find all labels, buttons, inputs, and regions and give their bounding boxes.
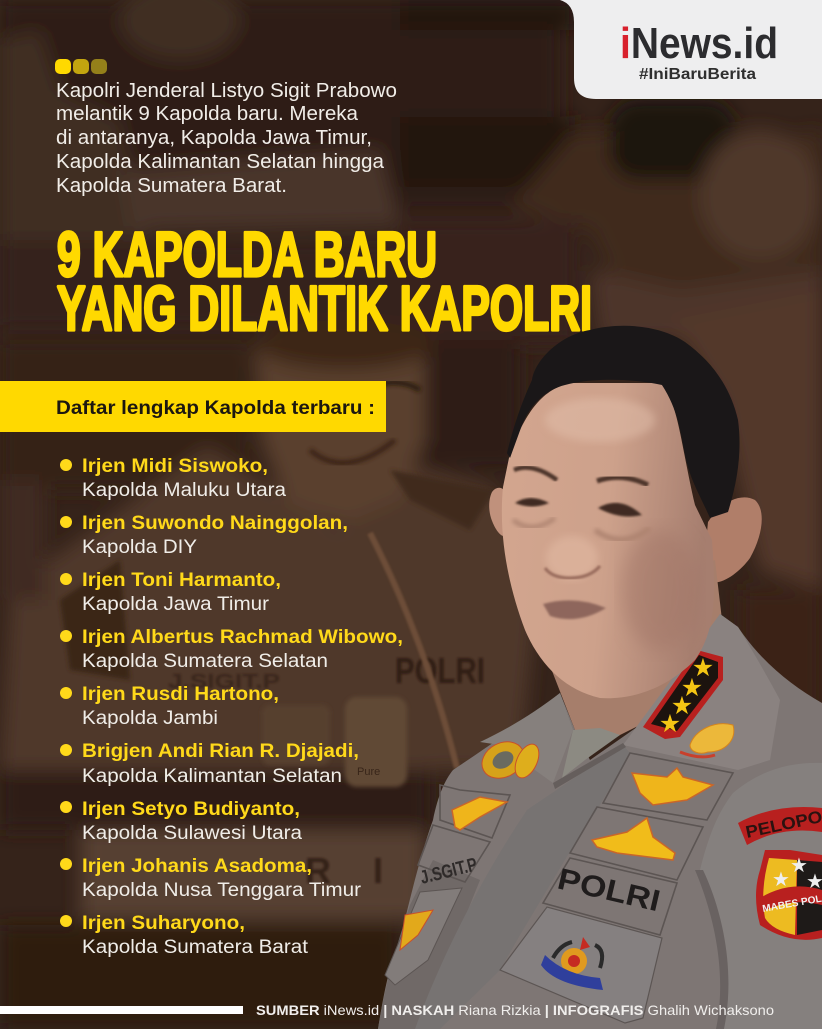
list item 6	[60, 741, 359, 787]
face	[502, 383, 714, 698]
sleeve small badge	[400, 910, 433, 950]
undershirt	[562, 728, 620, 778]
POLRI tag: POLRI	[554, 863, 663, 918]
ear left	[489, 488, 508, 536]
list item 1: Kapolda Maluku Utara	[82, 480, 286, 501]
uniform body	[378, 614, 822, 1029]
chest tabs seams	[418, 753, 733, 935]
footer credits: SUMBER iNews.id | NASKAH Riana Rizkia | INFOGRAFIS Ghalih Wichaksono	[256, 1002, 774, 1018]
shield patch	[756, 850, 822, 940]
stars: ★	[681, 674, 703, 702]
wing badge 2	[452, 797, 507, 830]
list item 6: Brigjen Andi Rian R. Djajadi,	[82, 741, 359, 762]
shield patch: MABES POL	[762, 894, 822, 915]
list item 7: Kapolda Sulawesi Utara	[82, 823, 302, 844]
list item 1	[60, 456, 286, 501]
list item 2: Kapolda DIY	[82, 537, 197, 558]
PELOPOR patch: PELOPO	[744, 807, 822, 842]
intro text block: Kapolri Jenderal Listyo Sigit Prabowo	[56, 80, 397, 102]
list item 9	[60, 913, 309, 958]
list item 5: Kapolda Jambi	[82, 708, 218, 729]
shield patch: ★	[790, 855, 808, 877]
background photo: blurred brown press conference: POLRI	[395, 650, 485, 691]
list item 8	[60, 856, 362, 901]
name tag: J.SGIT.P	[418, 854, 480, 889]
left chest shading	[378, 860, 480, 1029]
intro text block: Kapolda Kalimantan Selatan hingga	[56, 151, 385, 173]
left collar badges	[476, 735, 530, 785]
list item 8: Kapolda Nusa Tenggara Timur	[82, 880, 362, 901]
list item 9: Irjen Suharyono,	[82, 913, 245, 934]
icon: three decorative dots	[55, 59, 107, 74]
list item 8: Irjen Johanis Asadoma,	[82, 856, 312, 877]
stars	[659, 654, 714, 738]
left lapel	[480, 693, 573, 783]
wing badge	[632, 768, 713, 805]
list item 7	[60, 799, 302, 844]
list item 2	[60, 513, 348, 558]
list item 4	[60, 627, 403, 672]
facial features	[513, 398, 698, 650]
sleeve	[700, 763, 822, 1029]
background detail: collar and shadows	[390, 470, 495, 530]
list item 7: Irjen Setyo Budiyanto,	[82, 799, 300, 820]
ear right	[706, 497, 762, 582]
neck	[540, 560, 737, 750]
stars: ★	[659, 710, 681, 738]
stars: ★	[692, 654, 714, 682]
epaulette rank board	[643, 650, 723, 739]
title: 9 KAPOLDA BARU	[57, 220, 437, 290]
list item 2: Irjen Suwondo Nainggolan,	[82, 513, 348, 534]
pocket flap	[500, 907, 662, 1023]
left lapel fold shadow	[553, 743, 626, 789]
logo wordmark: iNews.id: iNews.id	[620, 19, 778, 68]
logo panel	[560, 0, 822, 99]
footer rule	[0, 1006, 243, 1014]
intro text block: Kapolda Sumatera Barat.	[56, 175, 287, 197]
list item 1: Irjen Midi Siswoko,	[82, 456, 268, 477]
background photo: blurred brown press conference: J.SIGIT.P	[168, 671, 280, 693]
title	[57, 220, 592, 344]
right collar panel	[623, 614, 780, 770]
intro text block: melantik 9 Kapolda baru. Mereka	[56, 103, 359, 125]
shield patch: ★	[772, 869, 790, 891]
intro text block	[56, 80, 397, 197]
list of new Kapolda	[60, 456, 403, 958]
list item 9: Kapolda Sumatera Barat	[82, 937, 309, 958]
pocket emblem	[541, 937, 603, 990]
right lapel	[415, 745, 630, 1029]
list heading banner	[0, 381, 386, 432]
right collar badge	[690, 724, 734, 753]
list item 4: Kapolda Sumatera Selatan	[82, 651, 328, 672]
list item 6: Kapolda Kalimantan Selatan	[82, 766, 342, 787]
intro text block: di antaranya, Kapolda Jawa Timur,	[56, 127, 372, 149]
list item 4: Irjen Albertus Rachmad Wibowo,	[82, 627, 403, 648]
list item 3: Kapolda Jawa Timur	[82, 594, 270, 615]
list item 5: Irjen Rusdi Hartono,	[82, 684, 279, 705]
list item 3: Irjen Toni Harmanto,	[82, 570, 281, 591]
list item 5	[60, 684, 279, 729]
logo tagline: #IniBaruBerita	[639, 66, 756, 83]
portrait of Kapolri in uniform	[378, 326, 822, 1029]
stars: ★	[671, 692, 693, 720]
left pocket flap	[385, 888, 462, 985]
background photo: blurred brown press conference: Pure	[357, 766, 380, 778]
list heading banner: Daftar lengkap Kapolda terbaru :	[56, 398, 375, 419]
hair	[507, 326, 740, 518]
list item 3	[60, 570, 281, 615]
background photo: blurred brown press conference: R I	[305, 850, 399, 891]
wing badge 3	[592, 818, 675, 860]
